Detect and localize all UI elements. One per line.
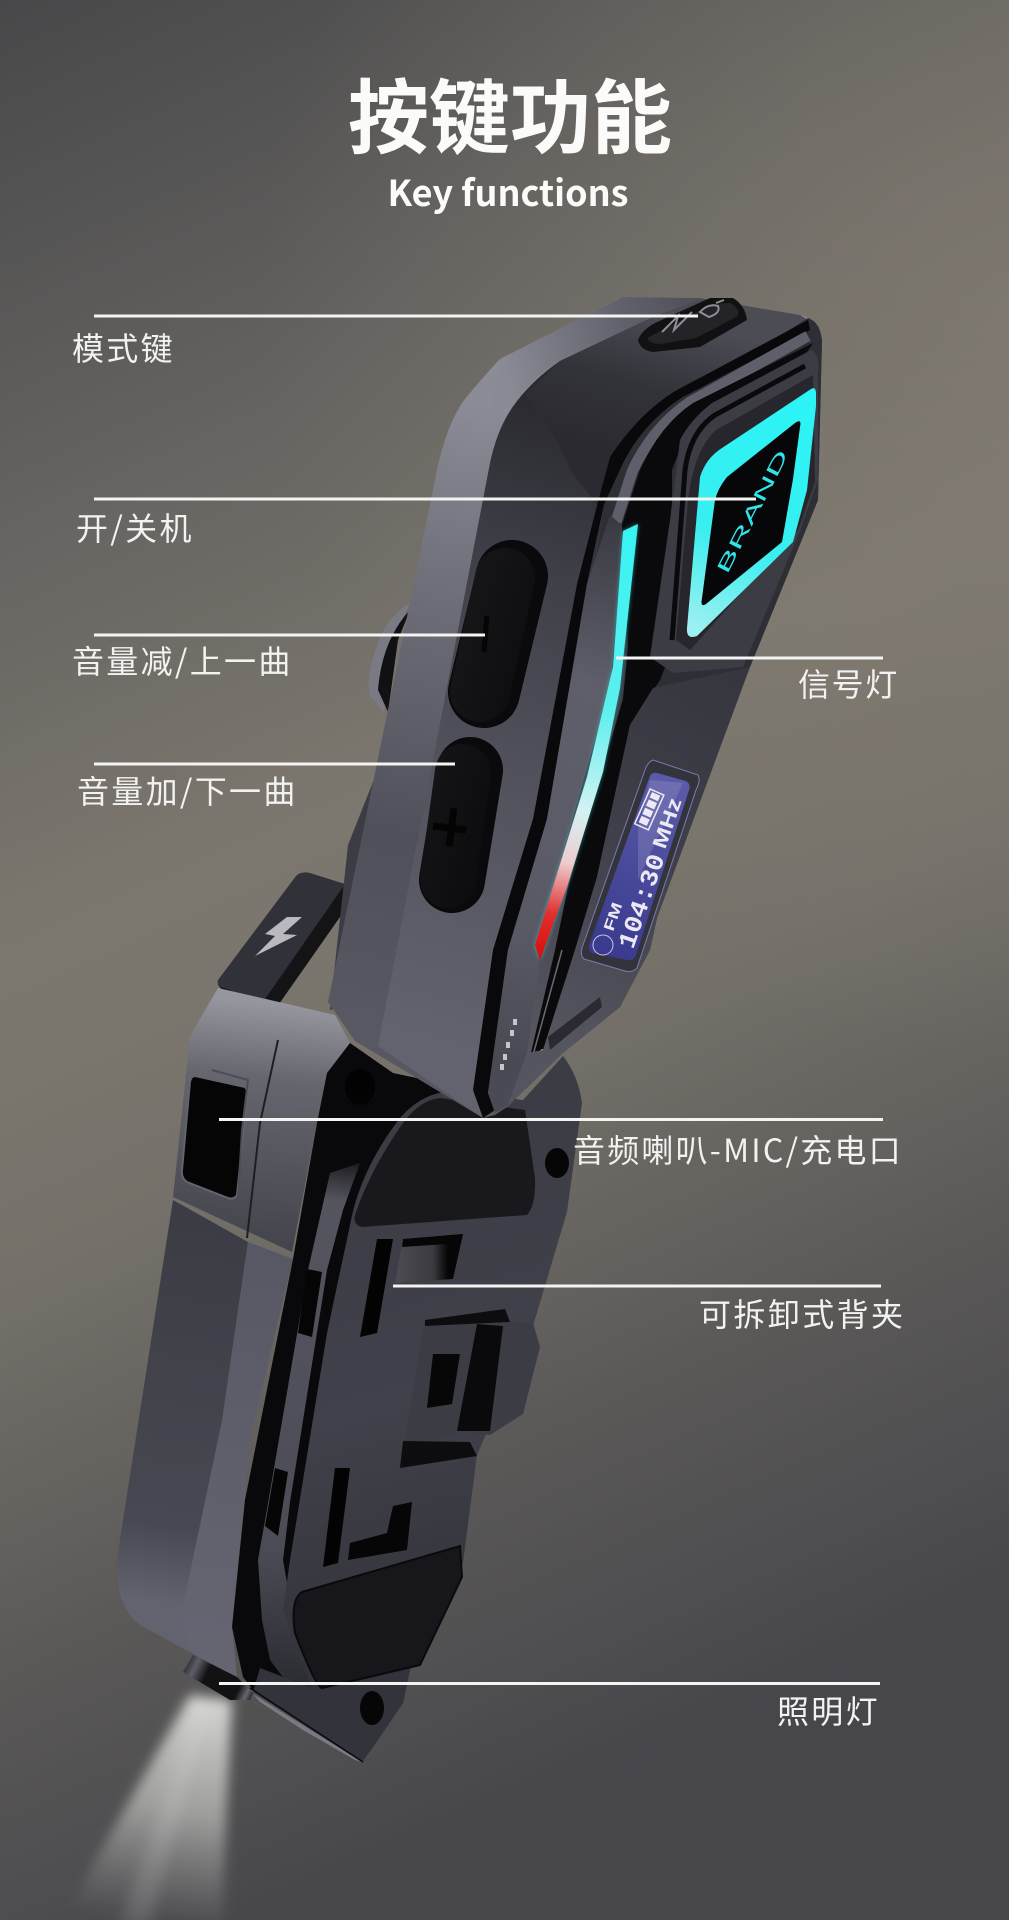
top-right underlay xyxy=(590,318,822,690)
label: signal light: 信号灯 xyxy=(798,660,899,706)
top sliver xyxy=(490,297,700,420)
front base xyxy=(488,340,822,1113)
power flap with bolt icon xyxy=(218,872,347,1014)
leader line: signal light xyxy=(616,656,883,660)
label: lamp: 照明灯 xyxy=(777,1687,880,1733)
leader line: mode key xyxy=(94,314,698,318)
LCD display xyxy=(581,760,699,972)
subtitle: Key functions xyxy=(388,165,628,217)
screw holes xyxy=(360,1148,569,1725)
top face xyxy=(525,298,808,505)
grey bevel xyxy=(488,515,625,1113)
leader line: back clip xyxy=(393,1284,881,1288)
silhouette xyxy=(328,297,822,1118)
grey bevel strip xyxy=(616,336,808,522)
side panel xyxy=(378,300,700,1118)
microphone dots xyxy=(500,1019,517,1070)
label: audio port: 音频喇叭-MIC/充电口 xyxy=(573,1126,903,1172)
label: removable back clip: 可拆卸式背夹 xyxy=(699,1290,905,1336)
lower front face xyxy=(507,667,750,1107)
lower rubber pad xyxy=(294,1546,462,1688)
grey rail xyxy=(258,1163,360,1700)
flashlight lens xyxy=(183,1655,253,1700)
black edge stripe xyxy=(473,320,810,1118)
top collar xyxy=(173,988,350,1252)
USB-C port xyxy=(182,1070,248,1200)
brand logo: BRAND xyxy=(713,447,792,577)
bluetooth badge xyxy=(593,935,613,955)
leader line: volume up xyxy=(94,762,455,766)
speaker slit xyxy=(548,997,602,1050)
upper rubber pad xyxy=(355,1098,535,1227)
label: volume up / next: 音量加/下一曲 xyxy=(77,767,298,813)
LCD display: MHz xyxy=(649,795,687,852)
black band xyxy=(232,1043,520,1762)
mode button xyxy=(638,298,747,352)
plus button xyxy=(433,770,470,880)
lower device: back clip unit xyxy=(116,872,582,1762)
light beam xyxy=(61,1695,232,1920)
LCD display: 104:30 xyxy=(613,851,672,953)
minus button xyxy=(480,576,512,692)
LED housing xyxy=(650,350,818,673)
upper device: main body xyxy=(328,297,822,1118)
bottom plate tab xyxy=(250,1668,410,1762)
side window slots xyxy=(265,1269,322,1536)
black groove xyxy=(530,343,813,1057)
dark screw recess xyxy=(345,1069,375,1105)
left shell xyxy=(116,1200,248,1655)
upper device: rear bracket xyxy=(330,603,410,1010)
LED frame xyxy=(687,388,816,637)
plate slots xyxy=(323,1234,463,1567)
label: volume down / previous: 音量减/上一曲 xyxy=(72,637,293,683)
middle shell xyxy=(183,1242,293,1677)
display text: FM xyxy=(601,900,626,933)
icon: lightning bolt xyxy=(255,917,302,956)
battery icon xyxy=(635,789,664,830)
label: power: 开/关机 xyxy=(76,504,194,550)
back plate xyxy=(283,1056,582,1762)
leader line: audio port xyxy=(219,1118,883,1121)
leader line: lamp xyxy=(219,1682,880,1685)
belt clip xyxy=(400,1309,540,1468)
title: 按键功能 xyxy=(348,54,672,171)
label: mode key: 模式键 xyxy=(72,324,175,370)
leader line: volume down xyxy=(94,634,485,636)
leader line: power xyxy=(94,498,756,500)
signal LED strip xyxy=(535,524,638,960)
